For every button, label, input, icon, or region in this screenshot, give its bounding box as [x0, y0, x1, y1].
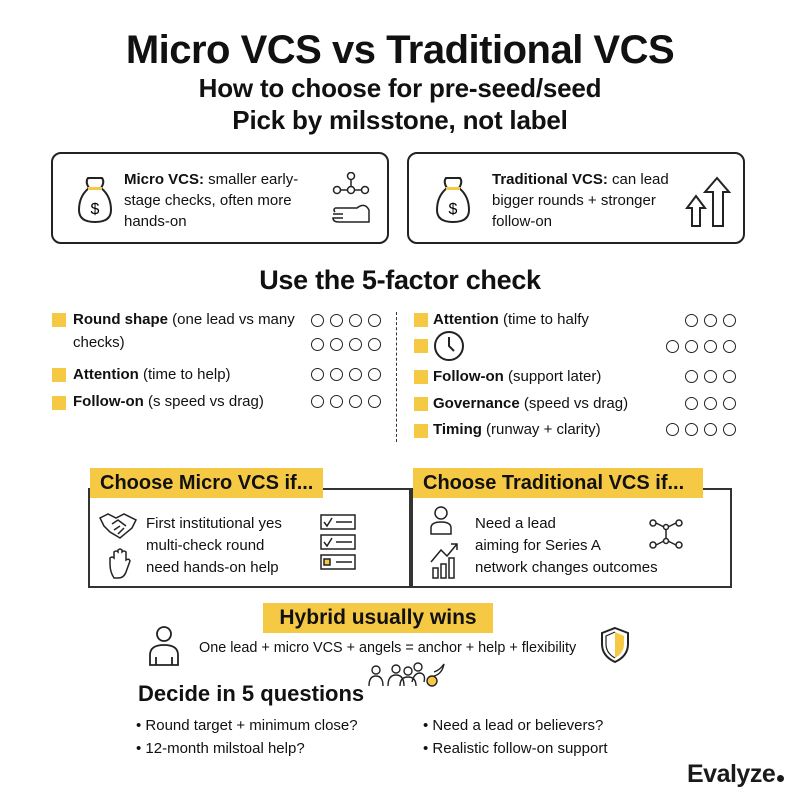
factors left column: Attention (time to help): [73, 366, 231, 383]
subtitle: How to choose for pre-seed/seed: [199, 73, 601, 103]
factors right column: Governance (speed vs drag): [433, 395, 628, 412]
text: hybrid formula: One lead + micro VCS + angels = anchor + help + flexibility: [199, 640, 576, 656]
text: • Realistic follow-on support: [423, 740, 608, 757]
label: choose micro: Choose Micro VCS if...: [100, 472, 313, 494]
icon: clock: [434, 331, 464, 361]
text: traditional vcs: [492, 171, 669, 230]
text: micro vcs: Micro VCS: smaller early-: [124, 171, 298, 188]
icon: checklist: [320, 514, 356, 570]
questions list: • 12-month milstoal help?: [136, 740, 305, 757]
panel: choose micro: [88, 488, 411, 588]
panel: choose micro: First institutional yes: [146, 515, 282, 532]
text: micro vcs: [124, 171, 298, 230]
panel: choose traditional: Need a lead: [475, 515, 556, 532]
panel: choose traditional: [411, 488, 732, 588]
icon: hand: [109, 548, 131, 579]
factors right column: [414, 311, 736, 438]
icon: up arrows: [685, 176, 731, 227]
factors right column: Timing (runway + clarity): [433, 421, 601, 438]
icon: money bag: [436, 177, 470, 223]
icon: money bag: $: [91, 201, 100, 218]
text: micro vcs: hands-on: [124, 213, 187, 230]
factors left column: [52, 311, 381, 410]
panel: choose micro: multi-check round: [146, 537, 264, 554]
subtitle: [199, 73, 601, 135]
icon: person: [430, 506, 452, 535]
text: micro vcs: stage checks, often more: [124, 192, 292, 209]
icon: hand with network: [332, 172, 370, 223]
icon: handshake: [99, 513, 137, 539]
divider: [396, 312, 397, 442]
factors left column: Follow-on (s speed vs drag): [73, 393, 264, 410]
text: traditional vcs: follow-on: [492, 213, 552, 230]
heading: 5-factor check: Use the 5-factor check: [259, 265, 541, 295]
icon: person: [149, 626, 179, 666]
label: hybrid: Hybrid usually wins: [279, 606, 477, 629]
text: traditional vcs: Traditional VCS: can lead: [492, 171, 669, 188]
label: choose traditional: [413, 468, 703, 498]
panel: choose micro: need hands-on help: [146, 559, 279, 576]
questions list: [136, 717, 358, 757]
label: choose traditional: Choose Traditional VCS if...: [423, 472, 684, 494]
factors left column: checks): [73, 334, 125, 351]
questions list: • Round target + minimum close?: [136, 717, 358, 734]
factors right column: Attention (time to halfy: [433, 311, 589, 328]
factors left column: Round shape (one lead vs many: [73, 311, 295, 328]
panel: micro vcs: [51, 152, 389, 244]
text: traditional vcs: bigger rounds + stronger: [492, 192, 656, 209]
panel: choose traditional: network changes outcomes: [475, 559, 658, 576]
factors right column: Follow-on (support later): [433, 368, 601, 385]
icon: people group: [368, 662, 445, 687]
panel: choose traditional: aiming for Series A: [475, 537, 601, 554]
logo: Evalyze: [687, 760, 775, 788]
icon: network: [649, 519, 683, 549]
label: choose micro: [90, 468, 323, 498]
heading: decide in 5 questions: Decide in 5 questions: [138, 681, 364, 706]
icon: growth chart: [430, 543, 458, 579]
icon: money bag: [78, 177, 112, 223]
text: • Need a lead or believers?: [423, 717, 603, 734]
label: hybrid: [263, 603, 493, 633]
icon: shield: [601, 626, 629, 664]
subtitle: Pick by milsstone, not label: [232, 105, 568, 135]
title: Micro VCS vs Traditional VCS: [126, 28, 674, 72]
panel: traditional vcs: [407, 152, 745, 244]
icon: money bag: $: [449, 201, 458, 218]
